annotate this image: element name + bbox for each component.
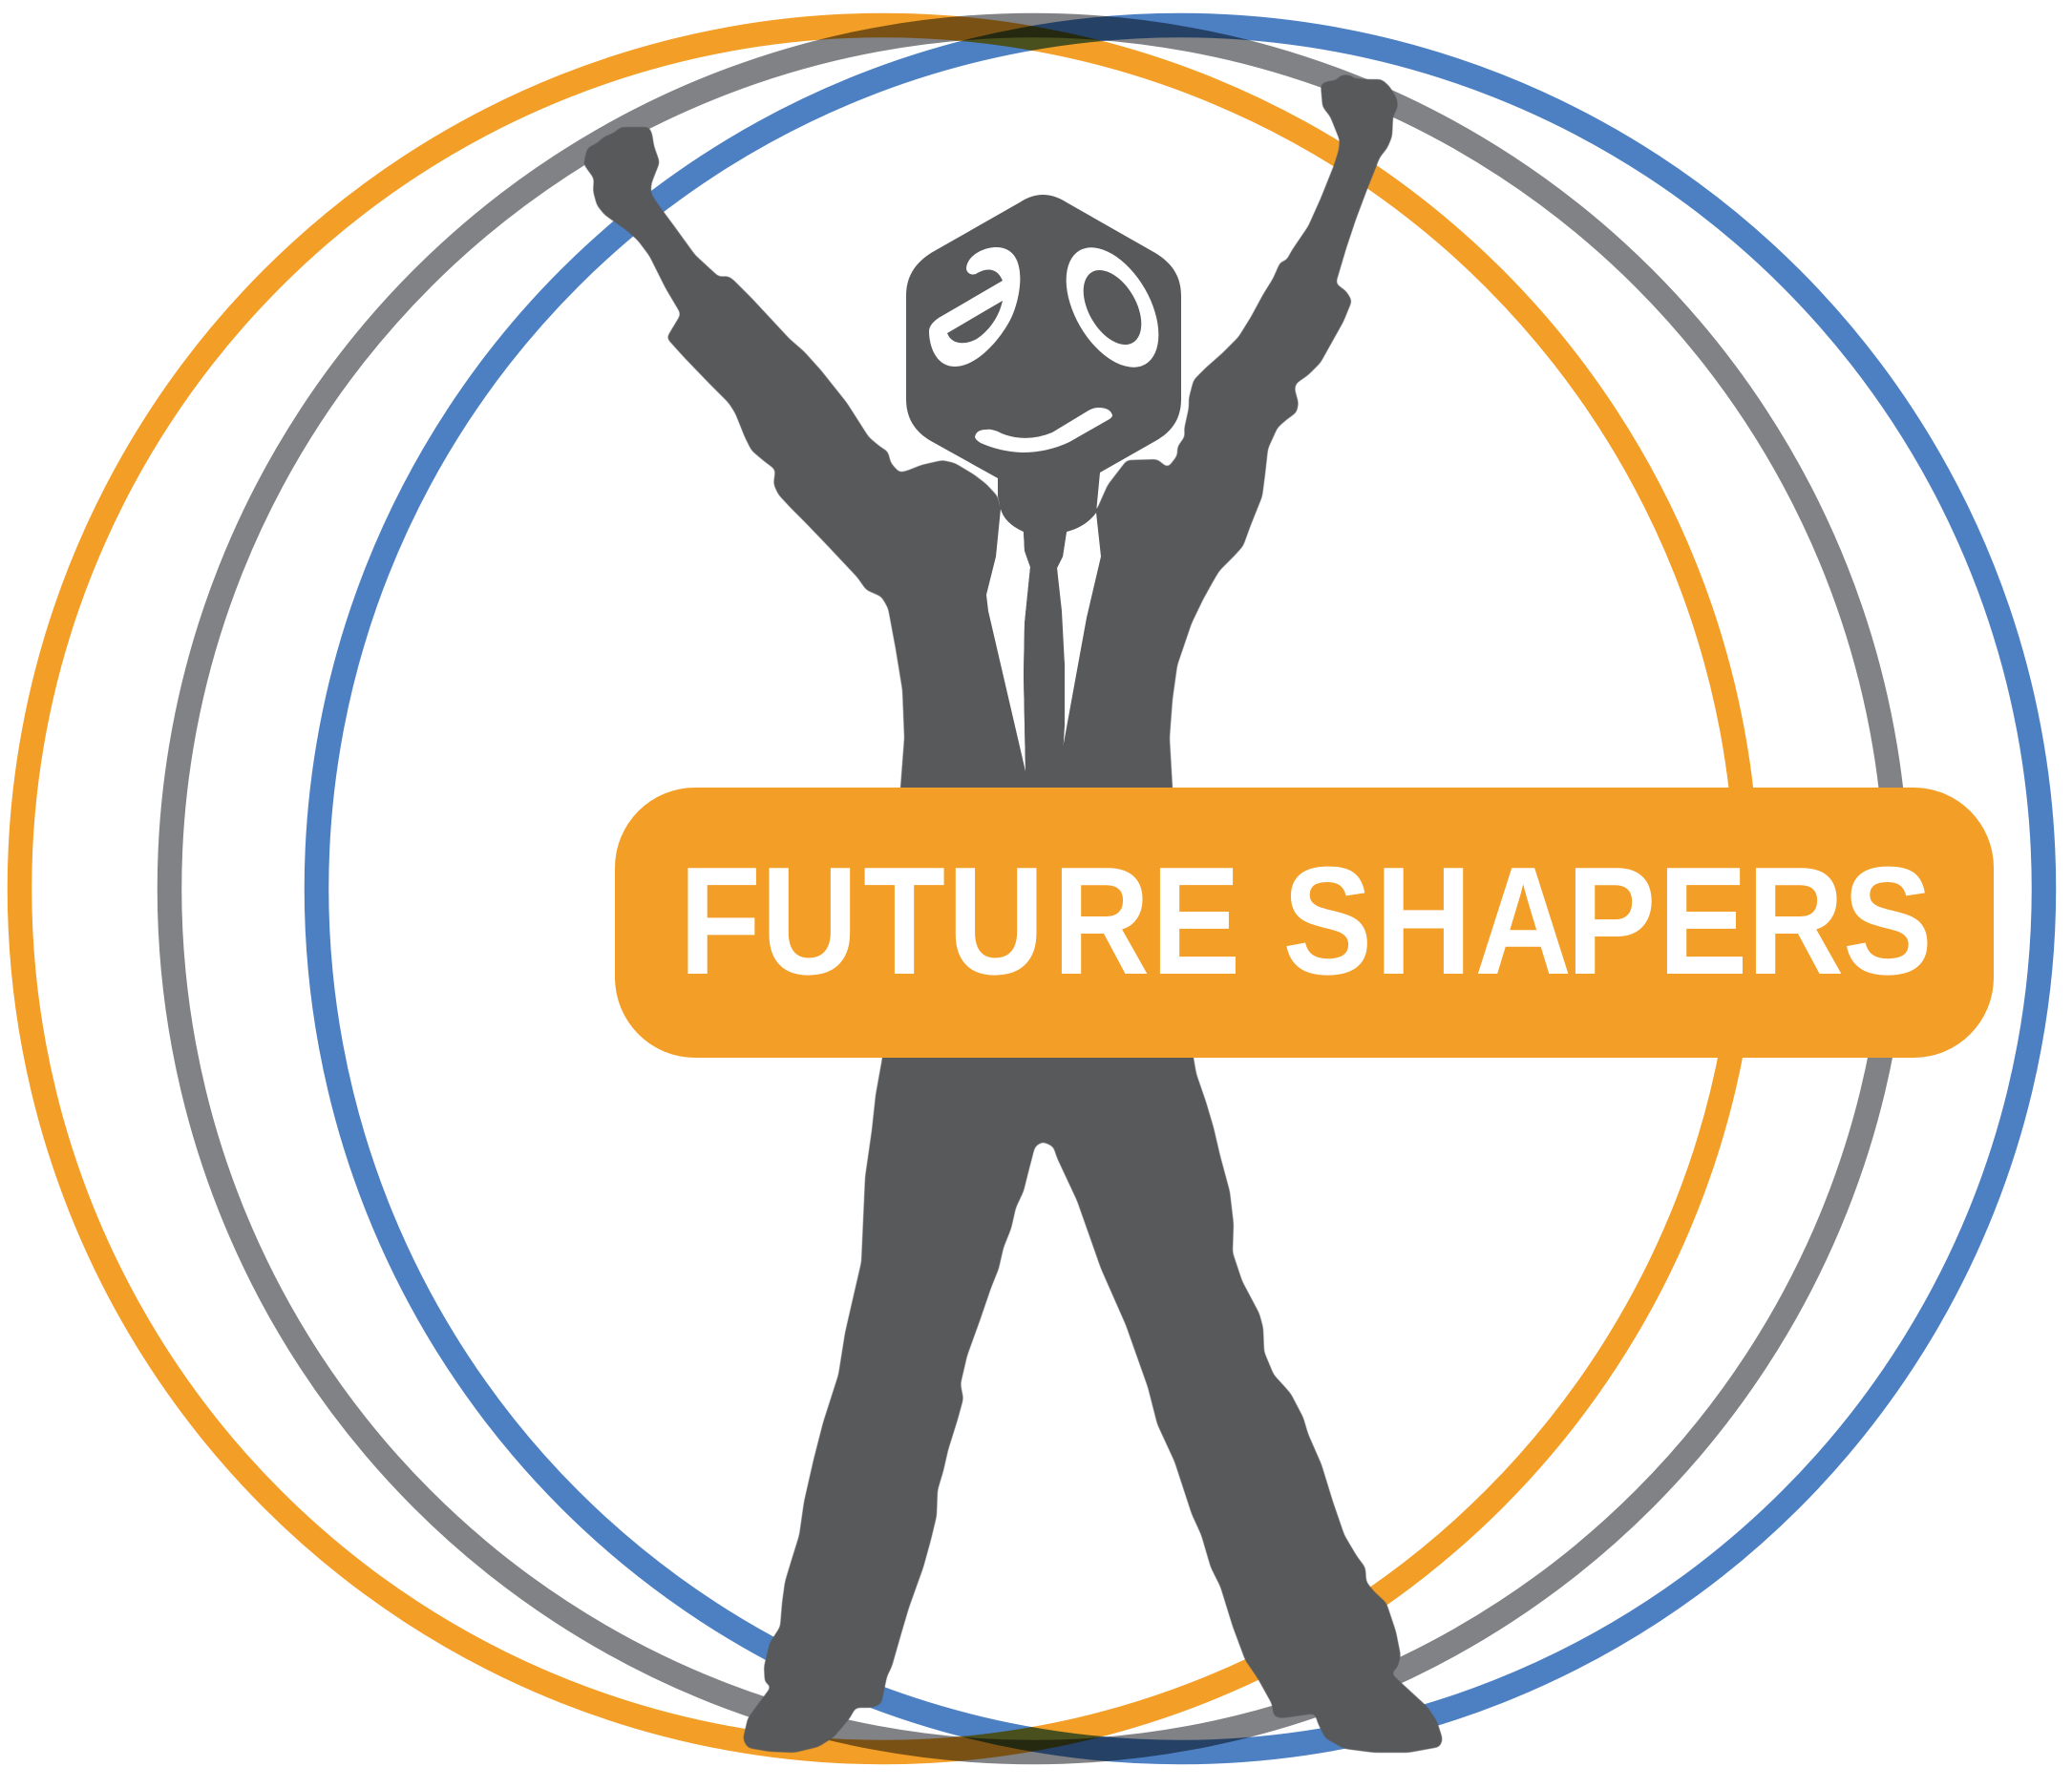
right eye (1047, 232, 1177, 383)
banner: orange rounded rectangle with title (615, 788, 1994, 1058)
head, neck and tie (906, 195, 1181, 788)
shirt: right white gap (1057, 513, 1101, 759)
right eye pupil (1071, 261, 1153, 354)
figure: silhouette of man with raised arms (583, 74, 1443, 1753)
right eye white ring (1047, 232, 1177, 383)
left eye (929, 247, 1020, 367)
left eye white shape (929, 247, 1020, 367)
title: FUTURE SHAPERS (679, 835, 1933, 1007)
shirt: left white gap (986, 509, 1030, 771)
left eye pupil (947, 301, 1003, 343)
smile (975, 408, 1112, 452)
figure body, arms and legs (583, 74, 1443, 1753)
banner background (615, 788, 1994, 1058)
